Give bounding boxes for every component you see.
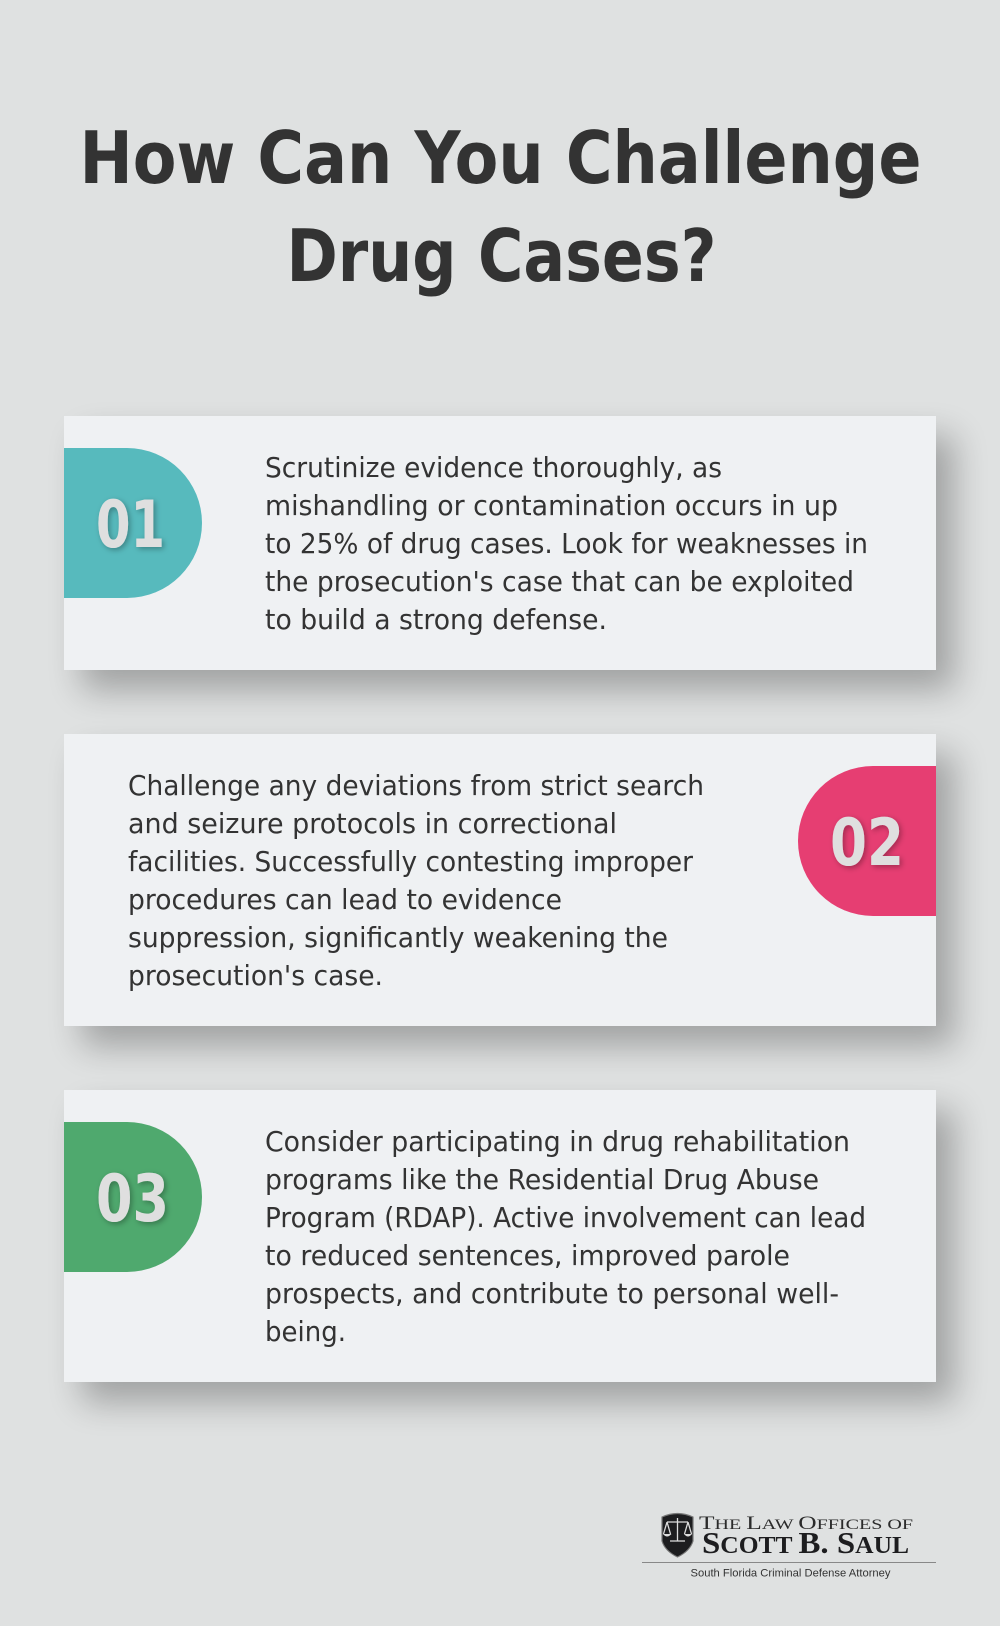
logo: The Law Offices of Scott B. Saul: SCOTT B. SAUL: [702, 1525, 909, 1560]
text: step 2 description: and seizure protocols in correctional: [128, 807, 617, 840]
panel: step 3: [64, 1090, 954, 1402]
badge: 02: 02: [830, 806, 904, 881]
text: step 2 description: facilities. Successfully contesting improper: [128, 845, 694, 878]
title: [80, 116, 922, 298]
logo: The Law Offices of Scott B. Saul: South Florida Criminal Defense Attorney: [690, 1568, 891, 1580]
text: step 2 description: prosecution's case.: [128, 959, 383, 992]
logo: The Law Offices of Scott B. Saul: T HE L AW O FFICES OF: [699, 1513, 913, 1534]
panel: step 2: [64, 734, 954, 1046]
text: step 1 description: the prosecution's case that can be exploited: [265, 565, 854, 598]
badge: 03: 03: [96, 1162, 169, 1237]
text: step 1 description: mishandling or contamination occurs in up: [265, 489, 838, 522]
text: step 1 description: to 25% of drug cases. Look for weaknesses in: [265, 527, 868, 560]
text: step 3 description: Program (RDAP). Active involvement can lead: [265, 1201, 866, 1234]
text: step 3 description: prospects, and contribute to personal well-: [265, 1277, 839, 1310]
badge: 03: [64, 1122, 202, 1272]
text: step 1 description: to build a strong defense.: [265, 603, 607, 636]
badge: 01: [64, 448, 202, 598]
text: step 2 description: procedures can lead to evidence: [128, 883, 562, 916]
text: step 3 description: to reduced sentences, improved parole: [265, 1239, 790, 1272]
badge: 01: 01: [96, 488, 165, 563]
text: step 1 description: Scrutinize evidence thoroughly, as: [265, 451, 722, 484]
text: step 2 description: [128, 769, 704, 992]
text: step 2 description: Challenge any deviations from strict search: [128, 769, 704, 802]
icon: shield with scales: [662, 1514, 693, 1557]
text: step 3 description: [265, 1125, 866, 1348]
text: step 3 description: programs like the Residential Drug Abuse: [265, 1163, 819, 1196]
text: step 2 description: suppression, significantly weakening the: [128, 921, 668, 954]
badge: 02: [798, 766, 936, 916]
logo: The Law Offices of Scott B. Saul: [642, 1513, 936, 1580]
panel: step 1: [64, 416, 954, 690]
text: step 3 description: Consider participating in drug rehabilitation: [265, 1125, 850, 1158]
text: step 3 description: being.: [265, 1315, 346, 1348]
title: Drug Cases?: [286, 214, 716, 298]
text: step 1 description: [265, 451, 868, 636]
